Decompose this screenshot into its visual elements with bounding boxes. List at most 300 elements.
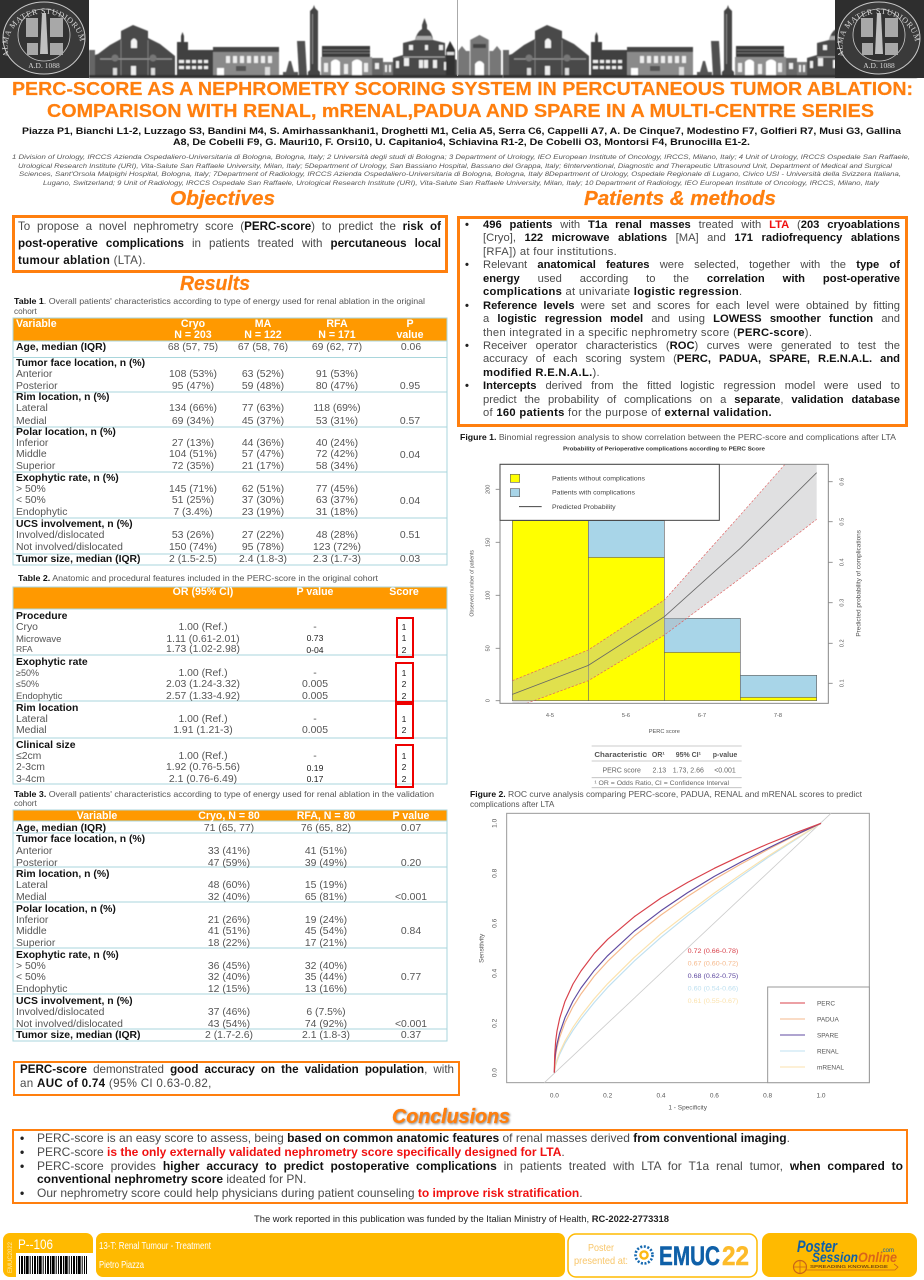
table 1: 0.03 — [400, 554, 420, 565]
authors: A8, De Cobelli F9, G. Mauri10, F. Orsi10, U. Capitanio4, Schiavina R1-2, De Cobelli O3, Montorsi F4, Brunocilla E1-2. — [173, 137, 750, 147]
table 1: value — [396, 329, 424, 341]
table 2: Rim location — [16, 703, 78, 714]
table 1: N = 203 — [174, 329, 212, 341]
panel: patients and methods: • — [465, 340, 469, 352]
title: PERC-SCORE AS A NEPHROMETRY SCORING SYSTEM IN PERCUTANEOUS TUMOR ABLATION: — [12, 79, 913, 99]
table 3: 0.37 — [401, 1030, 421, 1041]
table 1: Middle — [16, 449, 47, 460]
footer: EMUC22 logo: EMUC — [659, 1241, 720, 1271]
figure 1 odds ratio table: 95% CI¹ — [676, 752, 702, 759]
figure 1 chart: bars and predicted probability: 0 — [486, 699, 492, 702]
table 1: 31 (18%) — [316, 507, 358, 518]
table 2: 2 — [402, 691, 407, 701]
figure 1 chart: bars and predicted probability: 200 — [486, 485, 492, 494]
table 1: P — [406, 318, 414, 330]
table 3: Polar location, n (%) — [16, 904, 116, 915]
table 2: - — [313, 668, 317, 679]
table 2: P value — [297, 586, 334, 598]
table 3: <0.001 — [395, 1019, 427, 1030]
table 1: 118 (69%) — [313, 403, 361, 414]
table 1: 0.04 — [400, 496, 420, 507]
table 1: 0.51 — [400, 530, 420, 541]
figure 1 chart: bars and predicted probability: 6-7 — [698, 713, 706, 719]
table 3: Involved/dislocated — [16, 1007, 105, 1018]
table 3 caption continuation: cohort — [14, 799, 37, 808]
table 2: - — [313, 622, 317, 633]
title: COMPARISON WITH RENAL, mRENAL,PADUA AND SPARE IN A MULTI-CENTRE SERIES — [47, 101, 874, 121]
table 3: 41 (51%) — [208, 926, 250, 937]
table 1: 27 (22%) — [242, 530, 284, 541]
table 3: 2 (1.7-2.6) — [205, 1030, 253, 1041]
table 2: 1.00 (Ref.) — [178, 751, 228, 762]
footer: EMUC22 logo — [568, 1234, 757, 1277]
affiliations — [12, 154, 910, 187]
table 3: > 50% — [16, 961, 46, 972]
seal: left — [0, 0, 89, 78]
table 2: 0.17 — [307, 774, 324, 784]
table 2: Medial — [16, 725, 47, 736]
figure 1 odds ratio table: PERC score — [602, 767, 641, 774]
figure 1 chart: bars and predicted probability: 0.5 — [840, 518, 846, 526]
table 2: OR (95% CI) — [173, 586, 233, 598]
table 1: 21 (17%) — [242, 461, 284, 472]
table 1: 68 (57, 75) — [168, 342, 218, 353]
footer: EMUC22 logo: Poster — [588, 1242, 614, 1254]
affiliations: Lugano, Switzerland; 9 Unit of Radiology, IRCCS Ospedale San Raffaele, Urological Research Institute (URI), Vita-Salute San Raffaele University, Milan, Italy; 10 Department of Radiology, IEO European Institute of Oncology, IRCCS, Milano, Italy — [43, 180, 880, 187]
table 1: 53 (26%) — [172, 530, 214, 541]
table 1: 150 (74%) — [169, 542, 217, 553]
figure 1 chart: bars and predicted probability: 150 — [486, 538, 492, 547]
figure 2 chart: ROC curves: 0.8 — [763, 1093, 773, 1100]
heading: patients and methods: Patients & methods — [584, 188, 776, 210]
table 1: 58 (34%) — [316, 461, 358, 472]
table 2: Cryo — [16, 622, 38, 633]
figure 2 chart: ROC curves: 1.0 — [491, 818, 498, 828]
panel: patients and methods: Reference levels were set and scores for each level were obtained by fitting — [483, 300, 900, 312]
table 2: 1 — [402, 714, 407, 724]
table 1: 104 (51%) — [169, 449, 217, 460]
figure 1 chart: bars and predicted probability: Observed number of patients — [469, 550, 475, 617]
table 1: RFA — [326, 318, 348, 330]
footer: EMUC22 logo: 22 — [722, 1241, 749, 1271]
table 1: Polar location, n (%) — [16, 427, 116, 438]
footer: PosterSessionOnline logo — [762, 1233, 917, 1277]
panel: patients and methods: • — [465, 219, 469, 231]
table 1: Endophytic — [16, 507, 67, 518]
table 1: 80 (47%) — [316, 381, 358, 392]
table 3: 19 (24%) — [305, 915, 347, 926]
table 3: Exophytic rate, n (%) — [16, 950, 119, 961]
figure 2 chart: ROC curves: 0.6 — [491, 918, 498, 928]
figure 1 chart: bars and predicted probability: 50 — [486, 645, 492, 651]
table 2: 2 — [402, 679, 407, 689]
footer: poster id: P--106 — [18, 1236, 53, 1252]
table 3: 35 (44%) — [305, 972, 347, 983]
panel: patients and methods: • — [465, 259, 469, 271]
table 1: 63 (37%) — [316, 495, 358, 506]
panel: objectives — [12, 215, 448, 273]
table 1: Age, median (IQR) — [16, 342, 106, 353]
table 1: Medial — [16, 416, 47, 427]
table 1 caption continuation: cohort — [14, 307, 37, 316]
figure 1 chart: bars and predicted probability: 0.6 — [840, 478, 846, 486]
table 3 caption: Table 3. Overall patients' characteristics according to type of energy used for renal ablation in the validation — [14, 790, 434, 799]
panel: conclusions — [12, 1129, 908, 1204]
seal: right: ALMA MATER STUDIORUM — [837, 8, 920, 56]
table 1: Rim location, n (%) — [16, 392, 110, 403]
heading: objectives: Objectives — [170, 188, 275, 210]
table 1: 2.3 (1.7-3) — [313, 554, 361, 565]
table 3: 45 (54%) — [305, 926, 347, 937]
table 1: 69 (34%) — [172, 416, 214, 427]
table 3: Medial — [16, 892, 47, 903]
figure 1 chart: bars and predicted probability: Predicted Probability — [552, 504, 617, 511]
figure 2 chart: ROC curves: 0.61 (0.55-0.67) — [688, 998, 738, 1005]
figure 2 chart: ROC curves: 0.0 — [491, 1068, 498, 1077]
table 2: 2.57 (1.33-4.92) — [166, 691, 240, 702]
panel: conclusions: • — [20, 1131, 24, 1145]
table 1: UCS involvement, n (%) — [16, 519, 133, 530]
table 3: 32 (40%) — [208, 972, 250, 983]
footer: poster id: EMUC2022 — [8, 1241, 14, 1273]
footer: session and author: Pietro Piazza — [99, 1260, 144, 1271]
table 1: 2 (1.5-2.5) — [169, 554, 217, 565]
table 1: 95 (78%) — [242, 542, 284, 553]
table 2: Procedure — [16, 611, 68, 622]
figure 2 chart: ROC curves: 0.60 (0.54-0.66) — [688, 986, 738, 993]
table 3: 47 (59%) — [208, 858, 250, 869]
panel: conclusions: • — [20, 1159, 24, 1173]
seal: right — [835, 0, 924, 78]
figure 2 chart: ROC curves: 0.0 — [550, 1093, 559, 1100]
affiliations: Urological Research Institute (URI), Vita-Salute San Raffaele University, Milan, Italy; 5Department of Urology, San Bassiano Hospital, Bassano del Grappa, Italy; 6Interventional, Diagnostic and Therapeutic Ultrasound Unit, Department of Medical and Surgical — [18, 163, 893, 170]
table 3: P value — [393, 810, 430, 822]
figure 1 chart: bars and predicted probability: Patients with complications — [552, 490, 635, 497]
figure 1 chart: bars and predicted probability: 5-6 — [622, 713, 630, 719]
table 1: 91 (53%) — [316, 369, 358, 380]
figure 1 chart: bars and predicted probability: Probability of Perioperative complications according to PERC Score — [563, 447, 765, 453]
figure 1 chart: bars and predicted probability: PERC score — [649, 729, 680, 735]
figure 1 odds ratio table: Characteristic — [594, 752, 647, 759]
callout: validation result: PERC-score demonstrated good accuracy on the validation population, with — [20, 1063, 454, 1076]
figure 2 chart: ROC curves: 1 - Specificity — [668, 1105, 708, 1112]
table 3: Rim location, n (%) — [16, 869, 110, 880]
table 3 — [13, 810, 447, 1041]
figure 1 odds ratio table: 1.73, 2.66 — [673, 767, 704, 774]
table 1: 0.57 — [400, 416, 420, 427]
table 2: Score — [389, 586, 419, 598]
table 2: 2-3cm — [16, 762, 45, 773]
figure 1 chart: bars and predicted probability — [469, 447, 863, 735]
panel: conclusions: • — [20, 1186, 24, 1200]
table 1: 57 (47%) — [242, 449, 284, 460]
table 3: 74 (92%) — [305, 1019, 347, 1030]
table 2 — [13, 586, 447, 787]
table 1: 108 (53%) — [169, 369, 217, 380]
table 2: 2 — [402, 645, 407, 655]
table 2: Lateral — [16, 714, 48, 725]
table 3: 65 (81%) — [305, 892, 347, 903]
table 1: Superior — [16, 461, 56, 472]
footer: session and author — [96, 1233, 565, 1277]
table 3: < 50% — [16, 972, 46, 983]
table 1: 72 (35%) — [172, 461, 214, 472]
table 1: Lateral — [16, 403, 48, 414]
table 1: 45 (37%) — [242, 416, 284, 427]
figure 1 chart: bars and predicted probability: 0.4 — [840, 558, 846, 566]
table 1: 44 (36%) — [242, 438, 284, 449]
table 1: 145 (71%) — [169, 484, 217, 495]
figure 1 chart: bars and predicted probability: 100 — [486, 591, 492, 600]
table 1: 0.95 — [400, 381, 420, 392]
table 3: Tumor face location, n (%) — [16, 834, 145, 845]
table 1: 27 (13%) — [172, 438, 214, 449]
panel: patients and methods: accuracy of each scoring system (PERC, PADUA, SPARE, R.E.N.A.L. and — [483, 353, 900, 365]
table 1: 51 (25%) — [172, 495, 214, 506]
table 1: 2.4 (1.8-3) — [239, 554, 287, 565]
footer: PosterSessionOnline logo: Online — [858, 1249, 897, 1265]
table 1: 40 (24%) — [316, 438, 358, 449]
figure 2 chart: ROC curves: PERC — [817, 1001, 835, 1008]
table 2: Exophytic rate — [16, 657, 88, 668]
header banner: Bologna skyline — [89, 0, 917, 78]
footer: session and author: 13-T: Renal Tumour - Treatment — [99, 1241, 211, 1252]
table 1: Cryo — [181, 318, 206, 330]
table 1: Variable — [16, 318, 57, 330]
table 2: 2 — [402, 725, 407, 735]
table 2: ≤50% — [16, 679, 39, 689]
table 3: <0.001 — [395, 892, 427, 903]
table 2: 2 — [402, 762, 407, 772]
table 1: < 50% — [16, 495, 46, 506]
table 1: Involved/dislocated — [16, 530, 105, 541]
table 1: 69 (62, 77) — [312, 342, 362, 353]
table 1: 59 (48%) — [242, 381, 284, 392]
table 1: 62 (51%) — [242, 484, 284, 495]
table 3: 0.07 — [401, 823, 421, 834]
panel: patients and methods: modified R.E.N.A.L.). — [483, 367, 600, 379]
figure 1 odds ratio table: OR¹ — [652, 752, 665, 759]
table 3: Variable — [77, 810, 117, 822]
panel: patients and methods: energy used according to the correlation with post-operative — [483, 273, 900, 285]
figure 1 odds ratio table: 2.13 — [653, 767, 666, 774]
table 2 caption: Table 2. Anatomic and procedural features included in the PERC-score in the original cohort — [18, 574, 379, 583]
table 2: ≤2cm — [16, 751, 41, 762]
table 3: Lateral — [16, 880, 48, 891]
figure 1 chart: bars and predicted probability: 7-8 — [774, 713, 782, 719]
table 1 — [13, 318, 447, 565]
figure 2 chart: ROC curves: 0.4 — [491, 968, 498, 978]
heading: conclusions: Conclusions — [392, 1106, 510, 1128]
table 2: 0.005 — [302, 725, 328, 736]
table 3: 21 (26%) — [208, 915, 250, 926]
figure 2 chart: ROC curves: Sensitivity — [479, 933, 486, 963]
table 3: Inferior — [16, 915, 49, 926]
figure 2 chart: ROC curves: PADUA — [817, 1017, 840, 1024]
table 1: 23 (19%) — [242, 507, 284, 518]
table 3: Endophytic — [16, 984, 67, 995]
table 2: 2.03 (1.24-3.32) — [166, 679, 240, 690]
table 2: ≥50% — [16, 668, 39, 678]
callout: validation result — [13, 1061, 460, 1096]
footer: poster id — [3, 1233, 93, 1277]
table 1: 77 (63%) — [242, 403, 284, 414]
panel: patients and methods: complications at univariate logistic regression. — [483, 286, 742, 298]
table 2: 1.00 (Ref.) — [178, 668, 228, 679]
table 2: 0.19 — [307, 763, 324, 773]
panel: patients and methods: predict the probability of complications on a separate, validation database — [483, 394, 900, 406]
table 3: 37 (46%) — [208, 1007, 250, 1018]
panel: objectives: post-operative complications in patients treated with percutaneous local — [18, 237, 441, 250]
table 2: RFA — [16, 644, 33, 654]
seal: left: A.D. 1088 — [28, 61, 60, 70]
figure 1 chart: bars and predicted probability: 0.2 — [840, 639, 846, 647]
authors — [22, 126, 902, 147]
table 1: Exophytic rate, n (%) — [16, 473, 119, 484]
table 2: Endophytic — [16, 690, 63, 701]
figure 2 chart: ROC curves: SPARE — [817, 1033, 839, 1040]
table 3: 13 (16%) — [305, 984, 347, 995]
figure 2 chart: ROC curves: mRENAL — [817, 1065, 844, 1072]
table 3: RFA, N = 80 — [297, 810, 355, 822]
seal: left: ALMA MATER STUDIORUM — [2, 8, 86, 56]
panel: patients and methods: Receiver operator characteristics (ROC) curves were generated to test the — [483, 340, 900, 352]
panel: patients and methods: of 160 patients for the purpose of external validation. — [483, 407, 772, 419]
table 3: 0.84 — [401, 926, 421, 937]
footer: PosterSessionOnline logo: SPREADING KNOWLEDGE — [810, 1264, 888, 1269]
table 3: 71 (65, 77) — [204, 823, 254, 834]
panel: patients and methods: Relevant anatomical features were selected, together with the type of — [483, 259, 900, 271]
figure 1 chart: bars and predicted probability: 4-5 — [546, 713, 554, 719]
table 3: 15 (19%) — [305, 880, 347, 891]
table 3: Superior — [16, 938, 56, 949]
table 1: 134 (66%) — [169, 403, 217, 414]
table 1: 7 (3.4%) — [173, 507, 213, 518]
table 1: 37 (30%) — [242, 495, 284, 506]
table 3: 39 (49%) — [305, 858, 347, 869]
figure 2 chart: ROC curves: 0.8 — [491, 868, 498, 878]
footer: PosterSessionOnline logo: Session — [812, 1249, 858, 1265]
table 3: 0.77 — [401, 972, 421, 983]
panel: conclusions: PERC-score is the only externally validated nephrometry score specifically designed for LTA. — [37, 1145, 565, 1159]
panel: patients and methods: [Cryo], 122 microwave ablations [MA] and 171 radiofrequency ablations — [483, 232, 900, 244]
table 3: Tumor size, median (IQR) — [16, 1030, 141, 1041]
panel: conclusions: Our nephrometry score could help physicians during patient counseling to improve risk stratification. — [37, 1186, 583, 1200]
figure 2 chart: ROC curves: 0.2 — [603, 1093, 613, 1100]
figure 1 odds ratio table: ¹ OR = Odds Ratio, CI = Confidence Interval — [594, 780, 729, 787]
table 3: Middle — [16, 926, 47, 937]
table 3: 12 (15%) — [208, 984, 250, 995]
table 3: Age, median (IQR) — [16, 823, 106, 834]
table 2: 2 — [402, 774, 407, 784]
table 2: 1 — [402, 622, 407, 632]
title — [12, 79, 913, 121]
table 3: Posterior — [16, 858, 58, 869]
figure 1 chart: bars and predicted probability: 0.1 — [840, 679, 846, 687]
table 2: 1 — [402, 751, 407, 761]
table 1: Inferior — [16, 438, 49, 449]
panel: patients and methods: • — [465, 300, 469, 312]
table 2: 1.11 (0.61-2.01) — [166, 634, 240, 645]
table 1: 123 (72%) — [313, 542, 361, 553]
table 3: 6 (7.5%) — [306, 1007, 346, 1018]
affiliations: 1 Division of Urology, IRCCS Azienda Ospedaliero-Universitaria di Bologna, Bologna, Italy; 2 Università degli studi di Bologna; 3 Department of Urology, IEO European Institute of Oncology, IRCCS, Milano, Italy; 4 Unit of Urology, IRCCS Ospedale San Raffaele, — [12, 154, 910, 161]
table 1: 63 (52%) — [242, 369, 284, 380]
panel: objectives: To propose a novel nephrometry score (PERC-score) to predict the risk of — [18, 220, 441, 233]
figure 1 chart: bars and predicted probability: Patients without complications — [552, 476, 645, 483]
table 2: 3-4cm — [16, 774, 45, 785]
panel: patients and methods: Intercepts derived from the fitted logistic regression model were used to — [483, 380, 900, 392]
callout: validation result: an AUC of 0.74 (95% CI 0.63-0.82, — [20, 1077, 212, 1090]
panel: patients and methods: [RFA]) at four institutions. — [483, 246, 617, 258]
figure 1 odds ratio table: p-value — [713, 752, 737, 759]
table 3: 43 (54%) — [208, 1019, 250, 1030]
table 1: N = 171 — [318, 329, 356, 341]
table 3: 17 (21%) — [305, 938, 347, 949]
figure 2 chart: ROC curves — [479, 813, 869, 1112]
table 2: 1.00 (Ref.) — [178, 622, 228, 633]
table 1: Anterior — [16, 369, 53, 380]
table 3: 32 (40%) — [208, 892, 250, 903]
panel: patients and methods: 496 patients with T1a renal masses treated with LTA (203 cryoablations — [483, 219, 900, 231]
table 1: 48 (28%) — [316, 530, 358, 541]
footer: EMUC22 logo: presented at: — [574, 1255, 628, 1267]
figure 2 chart: ROC curves: 0.2 — [491, 1018, 498, 1028]
table 3: Not involved/dislocated — [16, 1019, 123, 1030]
table 3: 18 (22%) — [208, 938, 250, 949]
table 2: 1.73 (1.02-2.98) — [166, 644, 240, 655]
authors: Piazza P1, Bianchi L1-2, Luzzago S3, Bandini M4, S. Amirhassankhani1, Droghetti M1, Celia A5, Serra C6, Cappelli A7, A. De Cinque7, Modestino F7, Golfieri R7, Musi G3, Gallina — [22, 126, 902, 136]
table 1: Not involved/dislocated — [16, 542, 123, 553]
table 2: 1.92 (0.76-5.56) — [166, 762, 240, 773]
heading: results: Results — [180, 273, 250, 295]
table 2: 1 — [402, 633, 407, 643]
panel: objectives: tumour ablation (LTA). — [18, 254, 146, 267]
table 1: > 50% — [16, 484, 46, 495]
figure 2 chart: ROC curves: 0.68 (0.62-0.75) — [688, 973, 738, 980]
table 1: 72 (42%) — [316, 449, 358, 460]
table 3: 36 (45%) — [208, 961, 250, 972]
panel: patients and methods: a logistic regression model and using LOWESS smoother function and — [483, 313, 900, 325]
table 3: 2.1 (1.8-3) — [302, 1030, 350, 1041]
panel: conclusions: PERC-score provides higher accuracy to predict postoperative complications in patients treated with LTA for T1a renal tumor, when compared to — [37, 1159, 903, 1173]
table 2: 0.005 — [302, 691, 328, 702]
table 1: N = 122 — [244, 329, 282, 341]
table 1: 0.04 — [400, 450, 420, 461]
seal: right: A.D. 1088 — [863, 61, 895, 70]
table 1 caption: Table 1 . Overall patients' characteristics according to type of energy used for renal ablation in the original — [14, 297, 425, 306]
table 1: MA — [255, 318, 272, 330]
table 2: Clinical size — [16, 740, 76, 751]
table 2: 1 — [402, 668, 407, 678]
panel: conclusions: • — [20, 1145, 24, 1159]
figure 2 chart: ROC curves: 0.4 — [656, 1093, 666, 1100]
table 3: 0.20 — [401, 858, 421, 869]
figure 2 caption: Figure 2. ROC curve analysis comparing PERC-score, PADUA, RENAL and mRENAL scores to predict — [470, 790, 863, 799]
table 2: - — [313, 751, 317, 762]
table 1: Tumor size, median (IQR) — [16, 554, 141, 565]
figure 1 chart: bars and predicted probability: Predicted probability of complications — [856, 529, 863, 637]
figure 2 chart: ROC curves: 0.72 (0.66-0.78) — [688, 948, 738, 955]
figure 1 chart: bars and predicted probability: 0.3 — [840, 599, 846, 607]
panel: conclusions: PERC-score is an easy score to assess, being based on common anatomic features of renal masses derived from conventional imaging. — [37, 1131, 790, 1145]
table 3: 48 (60%) — [208, 880, 250, 891]
table 3: 32 (40%) — [305, 961, 347, 972]
table 1: 95 (47%) — [172, 381, 214, 392]
table 2: 1.00 (Ref.) — [178, 714, 228, 725]
table 3: UCS involvement, n (%) — [16, 996, 133, 1007]
figure 2 chart: ROC curves: RENAL — [817, 1049, 839, 1056]
